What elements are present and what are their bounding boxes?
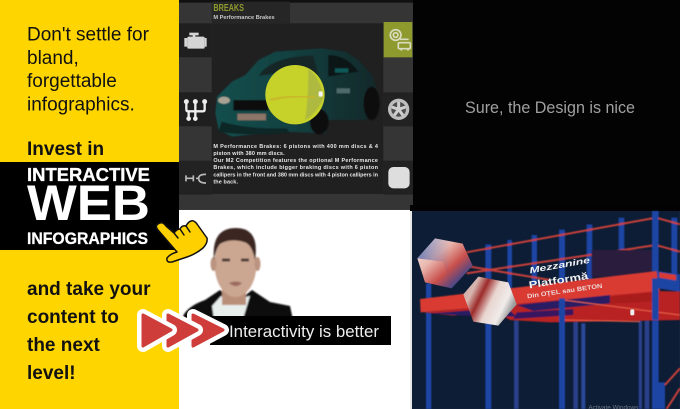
- banner: interactive web infographics: INFOGRAPHICS: [27, 229, 148, 248]
- text: brake description: M Performance Brakes: 6 pistons with 400 mm discs & 4: [213, 144, 379, 150]
- text: brake description: Brakes, which include bigger braking discs with 6 piston: [213, 165, 379, 171]
- text: opening statement: infographics.: [27, 94, 135, 116]
- steel posts and railings: [426, 211, 680, 409]
- text: opening statement: forgettable: [27, 71, 117, 92]
- icon: blank rounded square: [388, 167, 410, 188]
- panel: car configurator screenshot: [179, 0, 414, 210]
- text: opening statement: [27, 24, 150, 116]
- heading: invest in: Invest in: [27, 139, 104, 160]
- icon: brakes active tab: [384, 22, 412, 57]
- subheading: m performance brakes: M Performance Brakes: [213, 15, 275, 21]
- icon: gear shifter: [185, 100, 206, 120]
- platform title: [527, 255, 603, 300]
- panel: presenter on white: [143, 210, 413, 409]
- text: closing statement: [27, 279, 151, 384]
- highlight: yellow hotspot circle: [265, 65, 325, 124]
- text: closing statement: and take your: [27, 279, 151, 300]
- cursor: [630, 309, 634, 315]
- banner: interactive web infographics: WEB: [27, 175, 150, 231]
- text: opening statement: bland,: [27, 48, 79, 69]
- text: opening statement: Don't settle for: [27, 24, 150, 46]
- photo: presenter: [183, 228, 293, 320]
- red platform deck: [420, 271, 680, 322]
- text: brake description: piston with 380 mm discs.: [213, 151, 285, 157]
- panel: mezzanine platform 3D scene: [410, 205, 680, 409]
- panel: yellow message column: [0, 0, 179, 409]
- text: closing statement: the next: [27, 335, 101, 356]
- icon: suspension: [185, 174, 206, 183]
- platform title: Platformă: [528, 271, 590, 291]
- text: sure the design is nice: Sure, the Design is nice: [465, 98, 635, 117]
- text: brake description: Our M2 Competition features the optional M Performance: [213, 158, 378, 164]
- platform title: Din OȚEL sau BETON: [527, 283, 603, 300]
- icon: red-white hexagon: [463, 277, 517, 326]
- text: closing statement: content to: [27, 307, 119, 328]
- text: brake description: the back.: [213, 179, 238, 185]
- caption bar: interactivity is better: [210, 316, 391, 345]
- arrows: three red chevrons: [143, 315, 223, 346]
- banner: interactive web infographics: [0, 162, 179, 250]
- text: closing statement: level!: [27, 363, 76, 384]
- icon: wheel: [388, 99, 409, 120]
- icon: engine: [184, 33, 207, 49]
- text: brake description: callipers in the front and 380 mm discs with 4 piston callipers in: [213, 172, 379, 178]
- platform title: Mezzanine: [529, 255, 591, 275]
- text: brake description: [213, 144, 379, 185]
- caption bar: interactivity is better: Interactivity is better: [229, 322, 379, 341]
- heading: breaks: BREAKS: [213, 3, 244, 14]
- image: teal car: [215, 48, 380, 137]
- panel: black design statement: [413, 0, 680, 211]
- icon: pointing hand cursor: [156, 221, 207, 262]
- icon: blue-red hexagon: [417, 238, 473, 288]
- banner: interactive web infographics: INTERACTIVE: [27, 165, 150, 185]
